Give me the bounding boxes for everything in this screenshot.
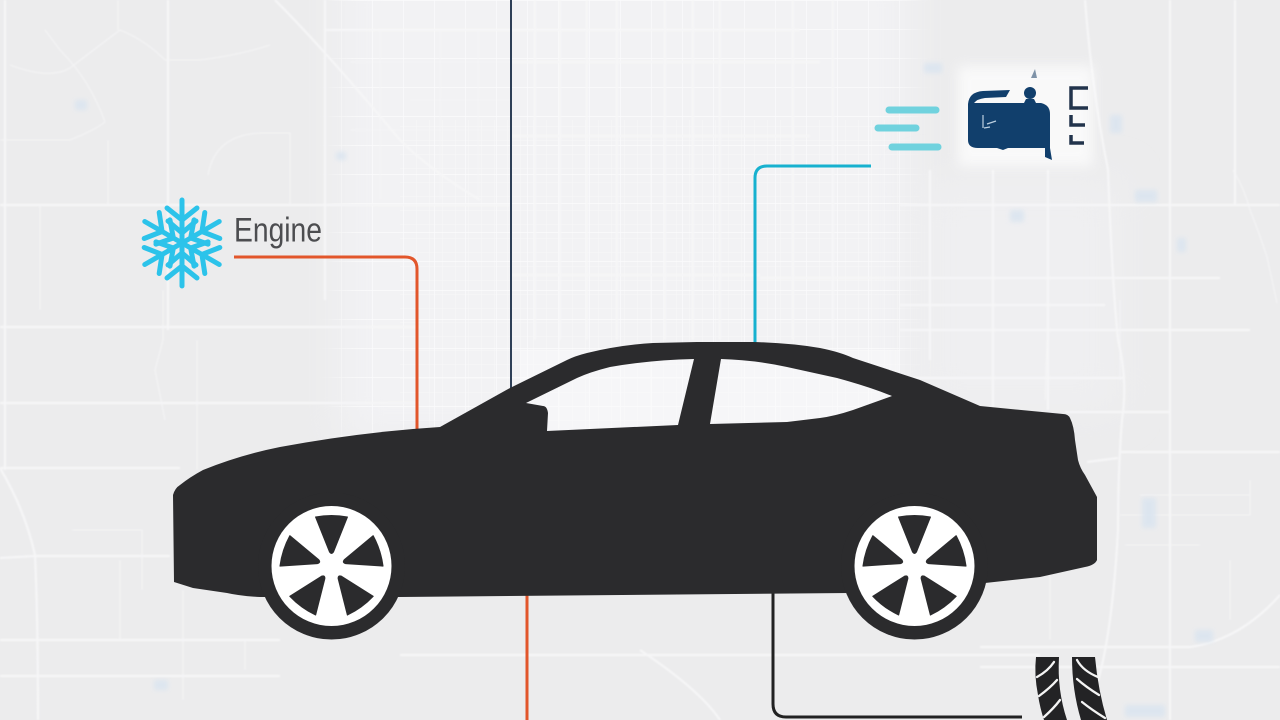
line: orange lower connector: [526, 590, 528, 720]
line: cyan connector: [755, 166, 871, 345]
label: Engine: Engine: [234, 212, 322, 250]
line: navy vertical: [510, 0, 512, 390]
line: orange engine connector: [234, 257, 417, 432]
icon: tyre tracks: [1035, 657, 1107, 720]
car body: [173, 342, 1097, 597]
icon: snowflake: [137, 200, 227, 286]
car silhouette: [173, 342, 1097, 640]
rear wheel: [841, 492, 988, 640]
icon: engine with speed lines: [878, 66, 1093, 166]
front wheel: [258, 492, 405, 640]
line: black tyre connector: [773, 590, 1022, 717]
